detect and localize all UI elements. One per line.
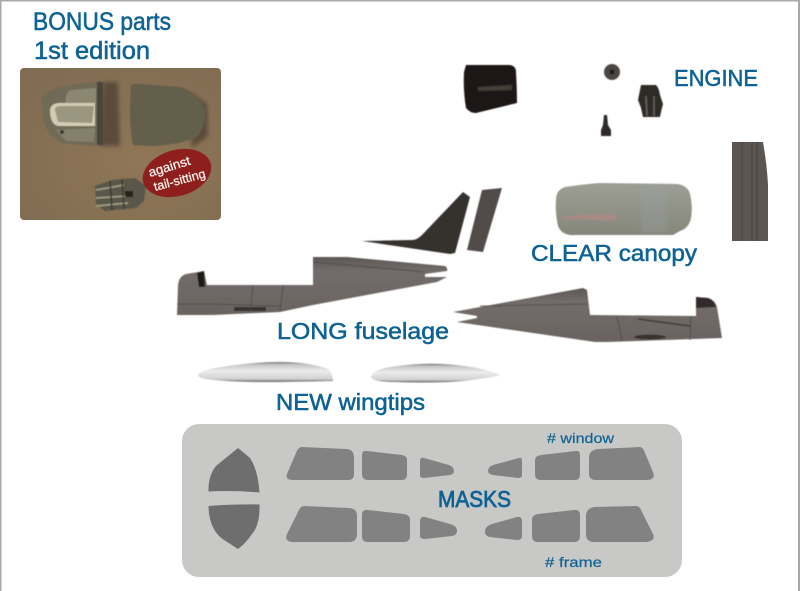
mask: windscreen bottom — [208, 504, 260, 549]
photo: closed metal cowling — [130, 84, 205, 146]
part: clear canopy — [556, 183, 692, 235]
part: vertical tail left — [362, 192, 470, 254]
callout: against tail-sitting: tail-sitting — [152, 167, 207, 194]
label: new wingtips: NEW wingtips — [276, 389, 425, 415]
heading: bonus parts: BONUS parts — [33, 8, 171, 36]
masks: bottom row windows — [286, 506, 654, 542]
heading: bonus parts: 1st edition — [34, 37, 150, 65]
label: clear canopy: CLEAR canopy — [531, 240, 698, 266]
photo: metal engine — [95, 178, 146, 211]
label: masks: MASKS — [438, 486, 511, 512]
part: engine block — [638, 85, 663, 117]
photo: open metal cowling — [41, 81, 103, 146]
photo: cowling shadows — [100, 82, 208, 148]
callout: against tail-sitting — [137, 141, 217, 205]
part: left fuselage half — [177, 257, 447, 315]
part: black cowl — [464, 65, 517, 113]
label: window: # window — [547, 431, 614, 446]
part: rudder strip — [732, 142, 768, 241]
label: long fuselage: LONG fuselage — [277, 318, 449, 344]
mask: windscreen top — [208, 448, 260, 492]
label: engine: ENGINE — [674, 65, 758, 91]
masks: top row windows — [287, 447, 654, 480]
part: propeller hub — [604, 64, 620, 80]
part: vertical tail right — [467, 188, 502, 252]
part: wingtip right — [371, 364, 501, 382]
label: frame: # frame — [545, 555, 602, 570]
panel: masks — [182, 424, 682, 577]
part: propeller shaft — [601, 115, 611, 136]
part: right fuselage half — [453, 288, 722, 342]
callout: against tail-sitting: against — [146, 153, 192, 180]
panel: bonus parts photo — [20, 68, 221, 220]
heading: bonus parts — [33, 8, 171, 65]
part: wingtip left — [198, 362, 333, 382]
